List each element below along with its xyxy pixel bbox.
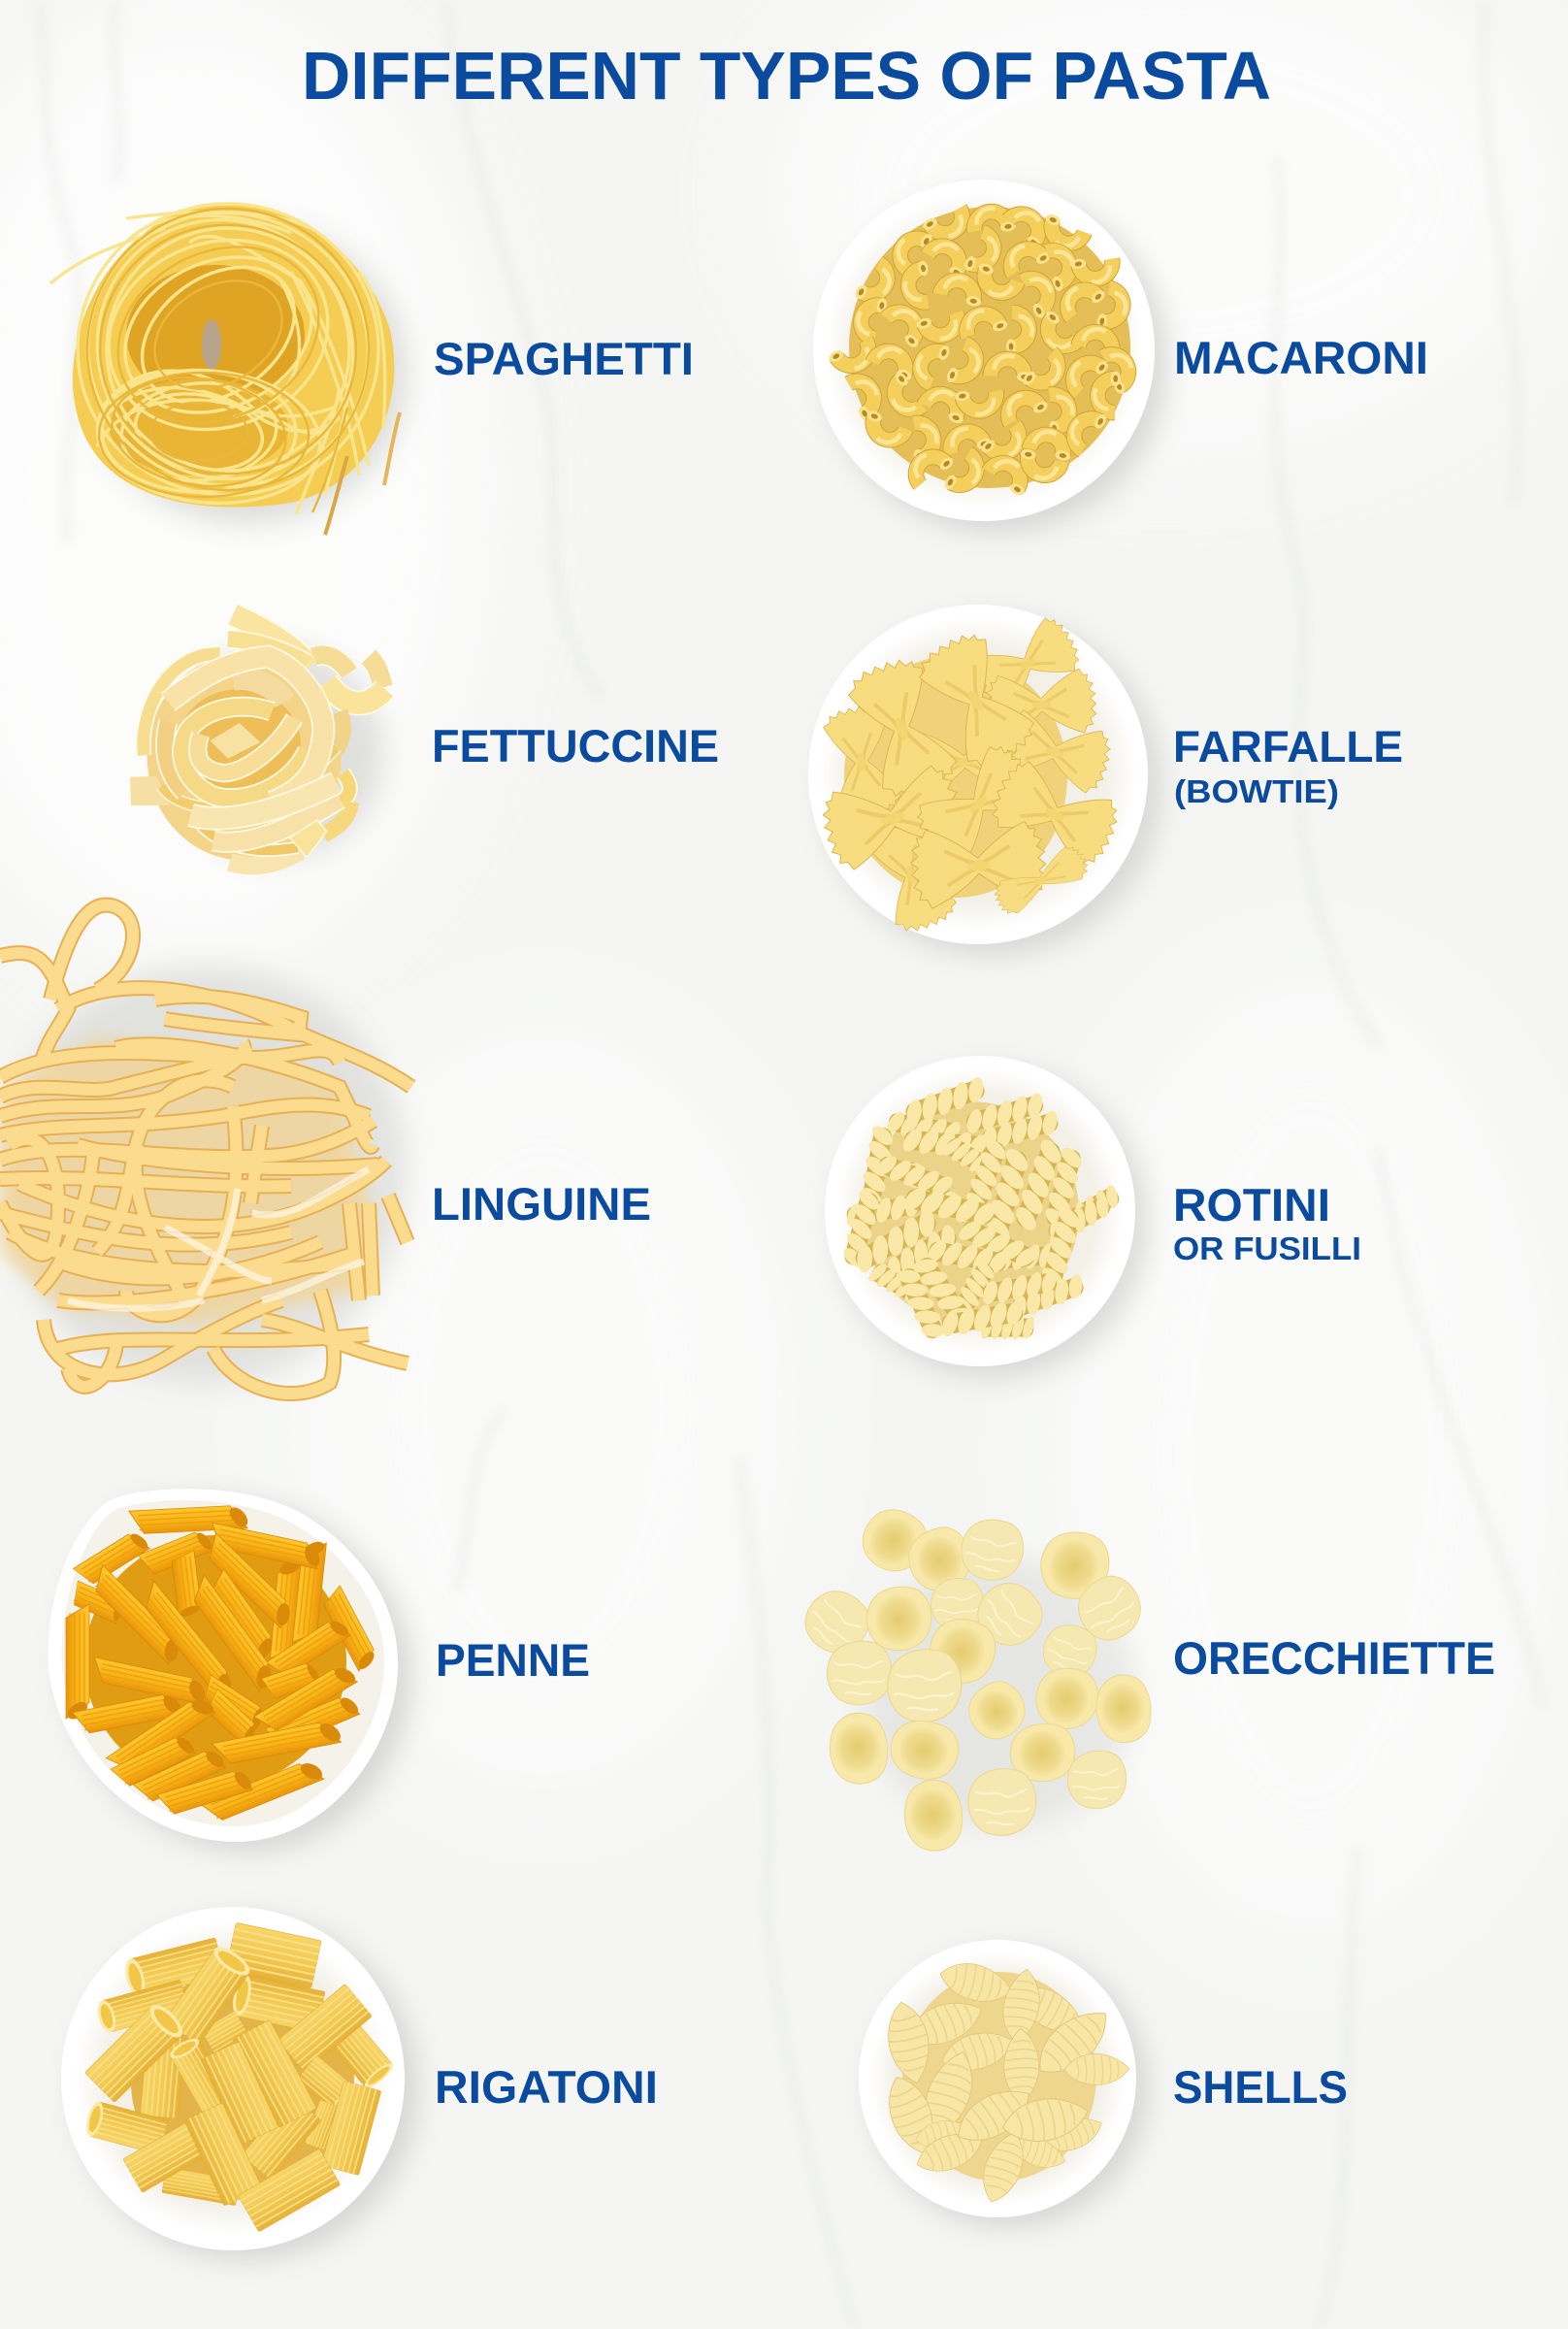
shell pieces bbox=[878, 1956, 1129, 2208]
label: farfalle bbox=[1173, 722, 1403, 809]
penne pieces bbox=[65, 1504, 381, 1826]
shells bowl bbox=[859, 1940, 1148, 2227]
rigatoni pieces bbox=[83, 1922, 396, 2232]
label: rotini: ROTINI bbox=[1173, 1179, 1330, 1230]
macaroni bowl bbox=[813, 180, 1168, 532]
macaroni pieces bbox=[827, 203, 1141, 500]
label: fettuccine: FETTUCCINE bbox=[432, 720, 719, 771]
farfalle pieces bbox=[816, 611, 1126, 937]
label: penne: PENNE bbox=[436, 1634, 590, 1686]
rigatoni bowl bbox=[61, 1907, 418, 2260]
label: orecchiette: ORECCHIETTE bbox=[1173, 1632, 1495, 1684]
label: farfalle: FARFALLE bbox=[1173, 722, 1403, 771]
label: spaghetti: SPAGHETTI bbox=[434, 333, 694, 384]
title: DIFFERENT TYPES OF PASTA bbox=[302, 38, 1271, 114]
label: macaroni: MACARONI bbox=[1174, 332, 1428, 383]
fettuccine nest bbox=[130, 614, 385, 866]
label: bowtie: (BOWTIE) bbox=[1174, 773, 1339, 809]
label: linguine: LINGUINE bbox=[432, 1178, 651, 1230]
orecchiette cluster bbox=[794, 1498, 1152, 1851]
label: rotini bbox=[1173, 1179, 1361, 1266]
linguine pile bbox=[0, 905, 411, 1394]
rotini pieces bbox=[836, 1071, 1127, 1347]
penne bowl bbox=[48, 1489, 412, 1852]
label: or fusilli: OR FUSILLI bbox=[1173, 1230, 1361, 1266]
spaghetti nest bbox=[47, 169, 408, 535]
farfalle bowl bbox=[808, 605, 1161, 956]
label: rigatoni: RIGATONI bbox=[435, 2061, 658, 2113]
rotini bowl bbox=[825, 1056, 1148, 1378]
label: shells: SHELLS bbox=[1173, 2061, 1348, 2113]
